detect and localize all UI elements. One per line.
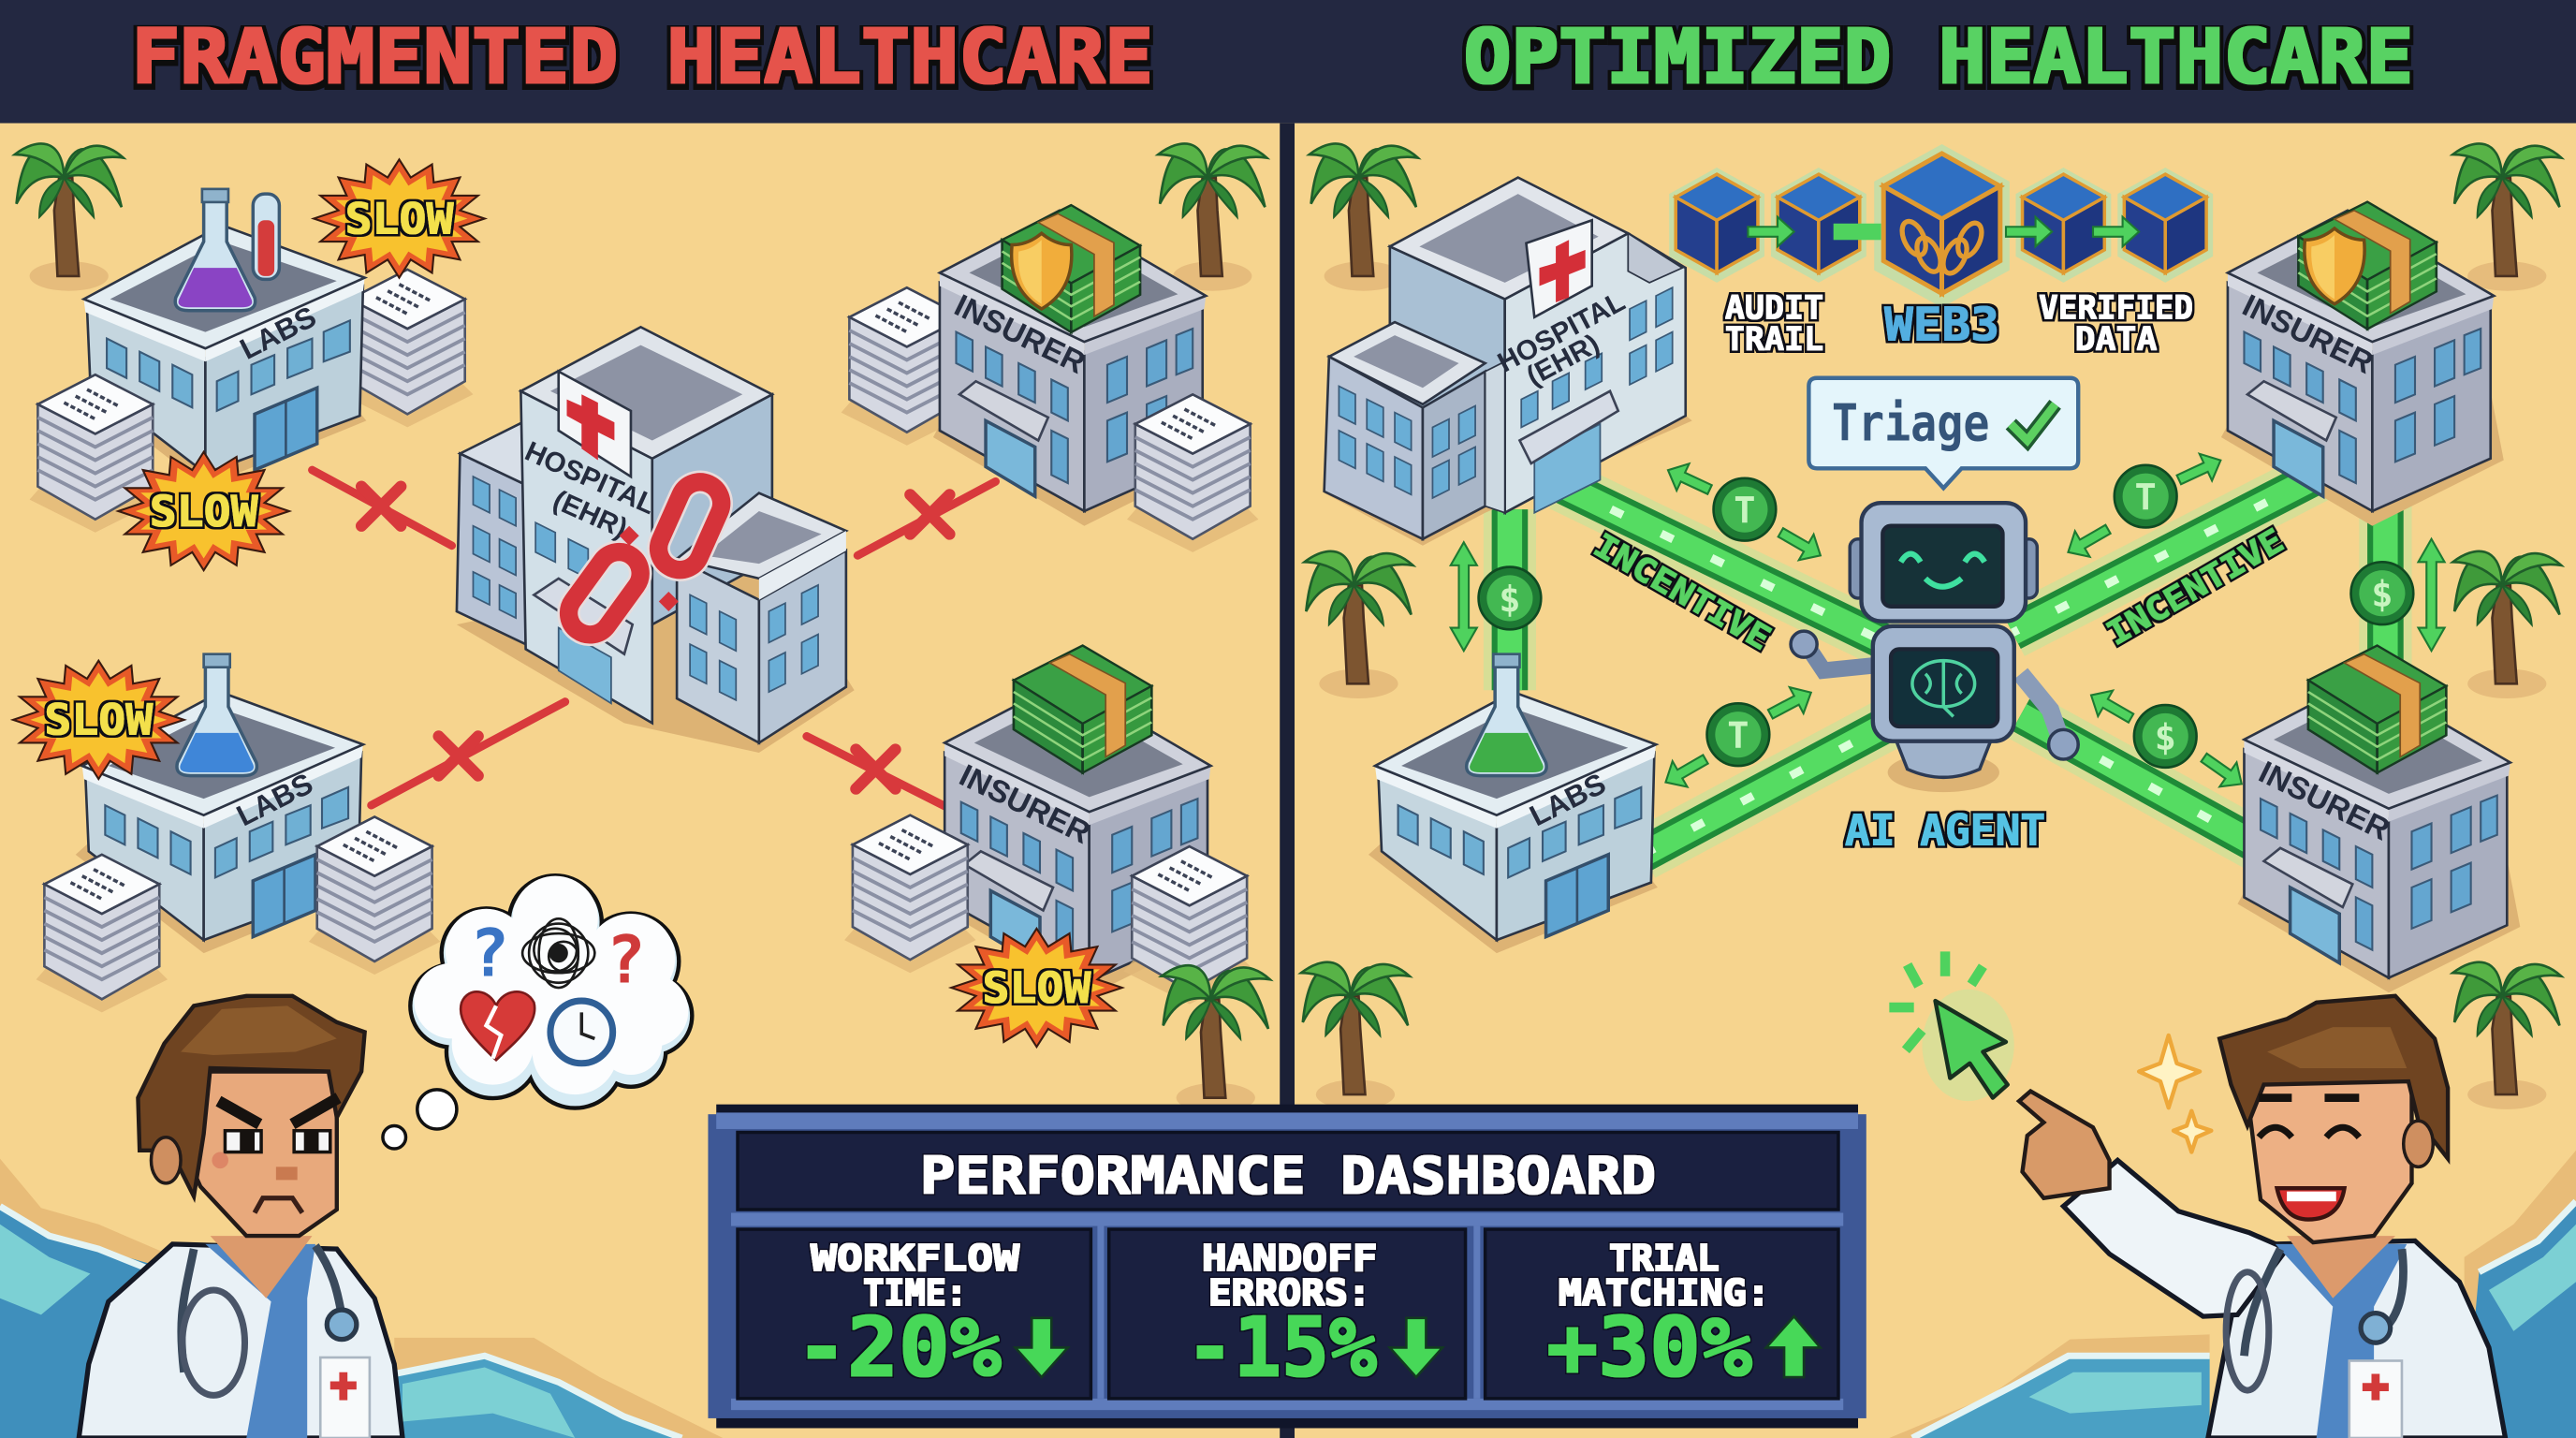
building: insurer bottom left panel: INSURER xyxy=(954,758,1095,851)
label: hospital ehr: (EHR) xyxy=(549,485,632,544)
slow burst lower right: SLOW xyxy=(983,963,1091,1013)
paper stacks behind buildings xyxy=(342,270,973,446)
building: labs bottom left xyxy=(76,654,365,953)
header background xyxy=(0,0,2576,124)
robot: ai agent xyxy=(1791,503,2078,792)
label: ai agent: AI AGENT xyxy=(1845,805,2045,855)
building: insurer top left panel: INSURER xyxy=(949,288,1090,381)
metric: trial matching: MATCHING: xyxy=(1559,1272,1770,1314)
broken heart xyxy=(461,991,534,1060)
label: hospital ehr: HOSPITAL xyxy=(1493,286,1630,378)
palm trees left panel xyxy=(15,143,1266,291)
label: audit trail: TRAIL xyxy=(1725,320,1823,359)
token coins: T xyxy=(2135,477,2157,519)
icon: blue flask xyxy=(177,654,256,776)
chain arrows xyxy=(1748,217,2139,246)
panel: optimized beach background xyxy=(1295,124,2576,1438)
building: insurer top optimized: INSURER xyxy=(2237,288,2378,381)
metric: trial matching xyxy=(1486,1229,1838,1399)
cursor icon xyxy=(1889,951,2014,1101)
label: audit trail xyxy=(1725,289,1823,359)
label: hospital ehr: HOSPITAL xyxy=(520,436,660,521)
clock xyxy=(550,1001,613,1064)
icon: test tube xyxy=(253,194,279,279)
character: frustrated doctor xyxy=(79,996,402,1438)
broken connection: labs bottom to hospital xyxy=(372,702,565,805)
incentive label right: INCENTIVE xyxy=(2100,521,2291,653)
metric: workflow time: WORKFLOW xyxy=(811,1238,1020,1280)
building: labs top left: LABS xyxy=(234,300,321,366)
icon: green flask xyxy=(1467,654,1546,776)
coin arrows xyxy=(1451,447,2445,796)
slow burst top xyxy=(314,159,485,278)
title: optimized healthcare: OPTIMIZED HEALTHCARE xyxy=(1464,14,2413,100)
label: web3: WEB3 xyxy=(1884,297,1999,351)
cube chain xyxy=(1669,144,2213,307)
broken connection: insurer top to hospital xyxy=(857,481,996,555)
slow burst lower left: SLOW xyxy=(44,696,154,745)
metric: handoff errors: ERRORS: xyxy=(1208,1272,1371,1314)
web3 blockchain xyxy=(1669,144,2213,359)
metric: handoff errors: -15% xyxy=(1186,1299,1377,1395)
metric: trial matching: TRIAL xyxy=(1609,1238,1720,1280)
sign: red cross xyxy=(559,372,631,477)
performance dashboard xyxy=(708,1105,1866,1428)
title: fragmented healthcare: FRAGMENTED HEALTHCARE xyxy=(131,14,1153,100)
beams: network connections xyxy=(1510,477,2385,855)
question mark red: ? xyxy=(607,922,646,999)
label: verified data: DATA xyxy=(2075,320,2157,359)
building: insurer top left panel xyxy=(933,205,1216,526)
token coins: T xyxy=(1734,490,1756,532)
building: labs bottom left: LABS xyxy=(231,766,318,832)
building: labs optimized xyxy=(1368,654,1658,953)
sparkles xyxy=(2139,1035,2211,1152)
label: audit trail: AUDIT xyxy=(1725,289,1823,328)
icon: purple flask xyxy=(175,189,256,311)
broken connection: insurer bottom to hospital xyxy=(807,736,949,809)
slow burst upper left xyxy=(118,452,289,570)
label: hospital ehr: (EHR) xyxy=(1522,329,1604,392)
paper stacks in front of buildings xyxy=(30,374,1258,1012)
building: insurer bottom left panel xyxy=(938,646,1221,996)
palm trees right panel xyxy=(1301,143,2561,1109)
icon: check mark xyxy=(2011,404,2056,440)
building: insurer top optimized xyxy=(2221,202,2504,526)
dashboard title panel: PERFORMANCE DASHBOARD xyxy=(920,1145,1656,1205)
icon: brain xyxy=(1912,661,1975,716)
label: verified data: VERIFIED xyxy=(2039,289,2193,328)
building: central hospital xyxy=(457,327,855,753)
slow burst lower right xyxy=(951,929,1122,1047)
metric: trial matching: +30% xyxy=(1546,1299,1752,1395)
dashboard title panel xyxy=(738,1132,1838,1210)
building: insurer bottom optimized: INSURER xyxy=(2253,755,2394,848)
dashboard frame xyxy=(708,1105,1866,1428)
palm tree lower right of left panel xyxy=(1162,965,1270,1112)
slow burst top: SLOW xyxy=(345,194,454,243)
scribble xyxy=(522,918,594,988)
building: hospital optimized xyxy=(1325,178,1692,546)
building: labs optimized: LABS xyxy=(1524,766,1611,832)
center divider xyxy=(1280,124,1295,1438)
token coins: $ xyxy=(2155,716,2176,758)
metric: workflow time: TIME: xyxy=(863,1272,967,1314)
token coins: T xyxy=(1727,715,1749,757)
building: labs top left xyxy=(77,189,366,487)
token coins xyxy=(1479,465,2413,768)
icon: broken chain xyxy=(561,476,728,643)
panel: fragmented beach background xyxy=(0,124,1280,1438)
token coins: $ xyxy=(1499,579,1521,621)
metric: handoff errors: HANDOFF xyxy=(1202,1238,1378,1280)
metric: handoff errors xyxy=(1109,1229,1466,1399)
broken connection: labs top to hospital xyxy=(312,470,452,546)
label: verified data xyxy=(2039,289,2193,359)
question mark blue: ? xyxy=(470,916,509,992)
triage speech bubble: Triage xyxy=(1832,392,1989,452)
token coins: $ xyxy=(2371,574,2393,616)
slow burst upper left: SLOW xyxy=(150,487,258,536)
sign: red cross xyxy=(1526,220,1592,317)
incentive label left: INCENTIVE xyxy=(1587,526,1777,658)
character: happy doctor xyxy=(2019,996,2506,1438)
slow burst lower left xyxy=(13,661,184,779)
building: insurer bottom optimized xyxy=(2237,646,2520,992)
metric: workflow time: -20% xyxy=(796,1299,1002,1395)
thought bubble xyxy=(383,876,690,1149)
pointing hand xyxy=(2019,1092,2110,1198)
metric: workflow time xyxy=(738,1229,1090,1399)
triage speech bubble xyxy=(1808,378,2078,488)
